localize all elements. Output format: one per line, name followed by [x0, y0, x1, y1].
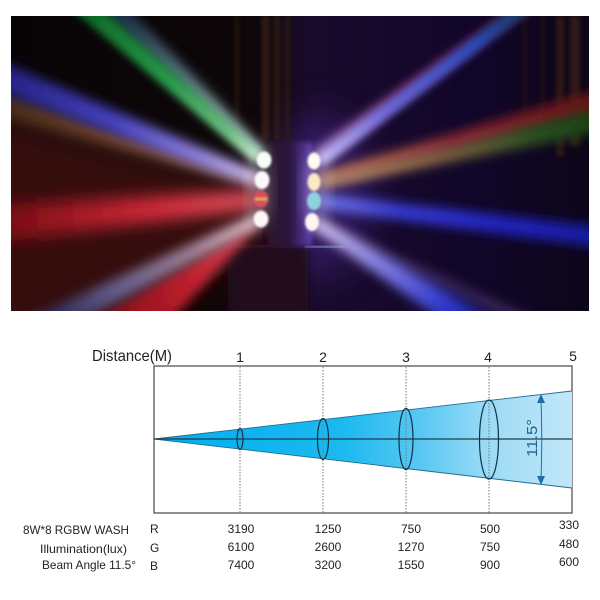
- beam: red and blue upper right: [310, 16, 532, 170]
- spec labels: Beam Angle 11.5°: [42, 558, 136, 572]
- distance axis labels: 4: [484, 349, 492, 365]
- beam: orange and blue left: [0, 48, 260, 187]
- colour channel labels: [150, 522, 159, 573]
- distance axis labels: 2: [319, 349, 327, 365]
- left lenses: [254, 152, 272, 228]
- glow around fixture: [249, 152, 328, 228]
- beam chart: [154, 366, 572, 513]
- spec labels: [23, 523, 136, 572]
- light cone: [154, 391, 572, 488]
- illumination values: [228, 518, 579, 572]
- beam spot ellipses: [237, 400, 498, 479]
- beam: red left: [0, 191, 258, 246]
- distance axis labels: 1: [236, 349, 244, 365]
- colour channel labels: G: [150, 541, 159, 555]
- curtain: left: [235, 16, 290, 141]
- distance axis labels: 5: [569, 348, 577, 364]
- illumination values: 900: [480, 558, 500, 572]
- beam: blue right: [318, 194, 600, 252]
- distance guide lines: [240, 367, 489, 513]
- centre axis: [154, 438, 572, 440]
- illumination values: 750: [401, 522, 421, 536]
- right lenses: [305, 152, 321, 231]
- illumination values: 1250: [315, 522, 342, 536]
- illumination values: 7400: [228, 558, 255, 572]
- cone edges: [154, 391, 572, 488]
- stage platform: [228, 245, 345, 316]
- distance axis labels: Distance(M): [92, 348, 172, 365]
- beam: green upper left: [72, 16, 274, 168]
- illumination values: 480: [559, 537, 579, 551]
- angle label: 11.5°: [524, 419, 541, 457]
- spec labels: Illumination(lux): [40, 542, 127, 556]
- beam: blue lower right: [306, 212, 529, 311]
- fixture body: [268, 142, 312, 246]
- left maroon haze: [0, 105, 370, 340]
- illumination values: 3190: [228, 522, 255, 536]
- distance axis labels: [92, 348, 577, 365]
- beam: red and green right: [318, 80, 600, 188]
- curtain: right: [523, 16, 580, 156]
- distance axis labels: 3: [402, 349, 410, 365]
- illumination values: 600: [559, 555, 579, 569]
- colour channel labels: B: [150, 559, 158, 573]
- photo: moving head light with coloured beams: [11, 16, 589, 311]
- illumination values: 1550: [398, 558, 425, 572]
- illumination values: 1270: [398, 540, 425, 554]
- illumination values: 2600: [315, 540, 342, 554]
- angle arrow: [537, 394, 545, 485]
- spec labels: 8W*8 RGBW WASH: [23, 523, 129, 537]
- illumination values: 750: [480, 540, 500, 554]
- beam: pale and red lower left: [30, 208, 268, 311]
- illumination values: 3200: [315, 558, 342, 572]
- illumination values: 6100: [228, 540, 255, 554]
- chart frame: [154, 366, 572, 513]
- illumination values: 500: [480, 522, 500, 536]
- illumination values: 330: [559, 518, 579, 532]
- colour channel labels: R: [150, 522, 159, 536]
